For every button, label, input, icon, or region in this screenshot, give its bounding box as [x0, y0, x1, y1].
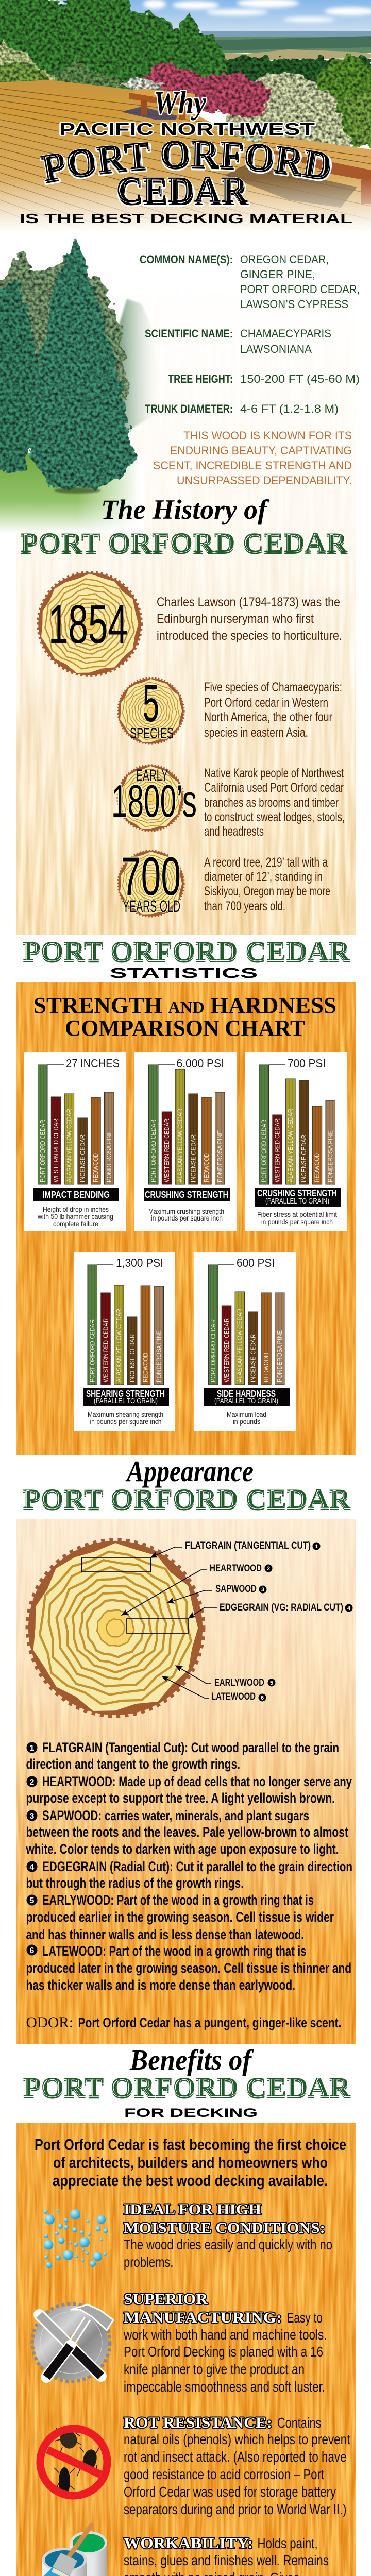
bar: port orford cedar: PORT ORFORD CEDAR [261, 1120, 268, 1182]
photo: port orford cedar trees [0, 238, 160, 533]
bar: port orford cedar: PORT ORFORD CEDAR [150, 1120, 157, 1182]
leader arrow: latewood [162, 1676, 209, 1698]
fact: trunk diameter: 4-6 FT (1.2-1.8 M) [240, 402, 339, 415]
chart description: complete failure [53, 1220, 98, 1228]
heading: the history of port orford cedar [20, 494, 348, 560]
hero photo: deck and landscape [0, 0, 371, 348]
benefit text: moisture: problems. [124, 2254, 173, 2270]
bar: incense cedar: INCENSE CEDAR [79, 1134, 86, 1182]
tree ring badge [27, 561, 153, 687]
chart description [148, 1208, 224, 1222]
callout: heartwood: HEARTWOOD [210, 1563, 262, 1574]
definition: flatgrain [26, 1740, 339, 1772]
bar: incense cedar: INCENSE CEDAR [129, 1334, 136, 1382]
description paragraph [153, 429, 352, 487]
benefit text: rot resistance: ROT RESISTANCE: [124, 2414, 272, 2431]
benefit text: moisture: IDEAL FOR HIGH [124, 2201, 261, 2218]
history item: 1854 [27, 561, 342, 687]
bar: redwood [262, 1293, 271, 1385]
definition: edgegrain: 4 [30, 1863, 35, 1872]
definitions list [26, 1740, 352, 2031]
definition: earlywood: 5 [30, 1896, 35, 1905]
history text [204, 766, 345, 839]
tree ring badge [111, 758, 197, 838]
history text [204, 680, 342, 740]
chart description: Maximum shearing strength [88, 1411, 163, 1418]
callout: heartwood: 2 [267, 1566, 270, 1572]
edgegrain cut box [127, 1619, 188, 1633]
benefit text: moisture [124, 2201, 332, 2270]
bar: western red cedar: WESTERN RED CEDAR [223, 1318, 230, 1382]
definition: sapwood: 3 [30, 1812, 35, 1821]
title line: Pacific Northwest: PACIFIC NORTHWEST [59, 120, 315, 139]
chart label [33, 1188, 119, 1201]
chart label: SHEARING STRENGTH [86, 1388, 165, 1399]
benefit text: workability: WORKABILITY: [124, 2535, 253, 2552]
chart label [144, 1188, 230, 1201]
chart label [83, 1388, 169, 1406]
tree ring badge: 5 [143, 674, 159, 733]
history text [204, 855, 330, 913]
bar: redwood: REDWOOD [203, 1153, 210, 1182]
definition: flatgrain: direction and tangent to the growth rings. [26, 1756, 240, 1772]
chart card: crushing strength parallel to grain [245, 1052, 347, 1231]
chart card: side hardness [194, 1252, 296, 1431]
title line: Cedar: CEDAR [117, 172, 249, 213]
chart title: STRENGTH AND HARDNESS [33, 993, 336, 1018]
heading: appearance port orford cedar: PORT ORFORD CEDAR [23, 1485, 351, 1516]
bar: incense cedar [248, 1312, 258, 1385]
chart description: in pounds per square inch [90, 1418, 162, 1426]
bar: incense cedar [189, 1094, 198, 1184]
tree ring badge: YEARS OLD [123, 897, 180, 916]
bar: western red cedar: WESTERN RED CEDAR [274, 1118, 281, 1182]
description paragraph: THIS WOOD IS KNOWN FOR ITS [183, 429, 352, 442]
value label: 6,000 PSI [176, 1057, 224, 1070]
callout: sapwood: 3 [261, 1587, 264, 1593]
chart description [37, 1206, 113, 1228]
chart description [227, 1411, 266, 1426]
heading: the history of port orford cedar: PORT ORFORD CEDAR [20, 527, 348, 558]
title line: is the best decking material: IS THE BEST DECKING MATERIAL [20, 212, 352, 226]
fact: scientific name: LAWSONIANA [240, 343, 312, 355]
heading: port orford cedar statistics: PORT ORFORD CEDAR [23, 938, 350, 969]
history item: 700 years old [111, 843, 330, 924]
history text: Edinburgh nurseryman who first [157, 612, 314, 626]
hero title [20, 86, 352, 226]
definition: heartwood [26, 1774, 352, 1806]
fact: common names: LAWSON’S CYPRESS [240, 298, 348, 311]
heading: port orford cedar statistics: PORT ORFORD CEDAR [23, 936, 350, 967]
callout: sapwood: SAPWOOD [215, 1584, 257, 1595]
tree ring badge: 700 [121, 846, 181, 907]
fact: tree height [168, 372, 360, 385]
bar: alaskan yellow cedar [286, 1079, 295, 1184]
callout: earlywood: EARLYWOOD [214, 1677, 264, 1688]
history text: introduced the species to horticulture. [157, 629, 342, 643]
bar: port orford cedar [38, 1065, 47, 1184]
chart description: in pounds [233, 1418, 260, 1426]
fact: common names: COMMON NAME(S): [140, 253, 233, 266]
bar: alaskan yellow cedar: ALASKAN YELLOW CEDAR [66, 1109, 73, 1182]
chart description [257, 1211, 337, 1226]
heading: port orford cedar statistics: STATISTICS [110, 965, 258, 981]
definition: edgegrain: but through the radius of the growth rings. [26, 1875, 244, 1891]
fact: common names: PORT ORFORD CEDAR, [240, 283, 360, 296]
bar: redwood [91, 1097, 100, 1184]
heading: appearance port orford cedar: PORT ORFORD CEDAR [23, 1483, 351, 1514]
bar: western red cedar [222, 1306, 231, 1385]
leader arrow: sapwood [167, 1590, 212, 1603]
bar: redwood [141, 1286, 150, 1385]
fact: common names: OREGON CEDAR, [240, 253, 329, 266]
chart label: CRUSHING STRENGTH [145, 1190, 228, 1200]
title line: Port Orford: PORT ORFORD [40, 140, 330, 181]
bar: redwood: REDWOOD [263, 1353, 270, 1382]
leader arrow: heartwood [122, 1570, 207, 1615]
description paragraph: ENDURING BEAUTY, CAPTIVATING [170, 444, 352, 457]
callout: edgegrain: 4 [347, 1605, 351, 1612]
chart label: CRUSHING STRENGTH [257, 1188, 337, 1198]
chart description: in pounds per square inch [261, 1218, 333, 1226]
panel: strength and hardness chart [16, 982, 356, 1455]
panel: history wood background [16, 278, 356, 935]
benefit text: manufacturing: Port Orford Decking is planed with a 16 [124, 2344, 323, 2360]
benefit text: workability: Holds paint, [258, 2535, 317, 2551]
icon: water drops [43, 2209, 108, 2268]
history text: Charles Lawson (1794-1873) was the [157, 595, 340, 609]
value label: 600 PSI [237, 1256, 275, 1269]
fact: tree height: TREE HEIGHT: [168, 372, 233, 385]
bar: redwood [312, 1106, 322, 1184]
chart label [255, 1188, 341, 1207]
chart label: (PARALLEL TO GRAIN) [94, 1397, 158, 1405]
heading: the history of port orford cedar: PORT ORFORD CEDAR [20, 529, 348, 560]
bar: redwood: REDWOOD [142, 1353, 149, 1382]
history text: North America, the other four [204, 710, 332, 724]
bar: western red cedar [51, 1097, 61, 1184]
heading: appearance port orford cedar [23, 1454, 351, 1516]
chart description: Fiber stress at potential limit [257, 1211, 337, 1218]
fact: common names: GINGER PINE, [240, 268, 315, 281]
bar: ponderosa pine: PONDEROSA PINE [327, 1130, 334, 1182]
fact: common names [140, 253, 360, 311]
history text: Port Orford cedar in Western [204, 696, 328, 710]
callout: flatgrain: 1 [315, 1544, 318, 1550]
chart description: with 50 lb hammer causing [37, 1213, 113, 1221]
bar: alaskan yellow cedar: ALASKAN YELLOW CEDAR [287, 1109, 294, 1182]
bar: port orford cedar [208, 1265, 218, 1385]
bar: incense cedar [127, 1317, 137, 1385]
bar: western red cedar: WESTERN RED CEDAR [163, 1118, 171, 1182]
history text [157, 595, 342, 643]
title line: Port Orford: PORT ORFORD [40, 142, 332, 185]
value label: 27 INCHES [66, 1057, 120, 1070]
chart description: Height of drop in inches [43, 1206, 109, 1213]
callout: latewood: LATEWOOD [211, 1691, 256, 1702]
heading: benefits of port orford cedar for decking: PORT ORFORD CEDAR [23, 2074, 351, 2105]
benefit text: manufacturing: work with both hand and machine tools. [123, 2327, 327, 2343]
value label: 700 PSI [288, 1057, 326, 1070]
bar: ponderosa pine: PONDEROSA PINE [156, 1330, 163, 1382]
benefit text: moisture: MOISTURE CONDITIONS: [124, 2219, 325, 2236]
chart description: in pounds per square inch [151, 1214, 223, 1222]
definition: edgegrain [26, 1859, 352, 1891]
fact: scientific name: SCIENTIFIC NAME: [145, 327, 233, 340]
bar: alaskan yellow cedar [114, 1285, 124, 1385]
bar: western red cedar: WESTERN RED CEDAR [53, 1118, 60, 1182]
tree ring badge: 1854 [48, 594, 128, 655]
definition: earlywood [26, 1892, 334, 1942]
callout: flatgrain: FLATGRAIN (TANGENTIAL CUT) [185, 1540, 311, 1551]
definition: heartwood: 2 [30, 1778, 35, 1787]
bar: ponderosa pine [275, 1293, 284, 1385]
benefit text: rot resistance: Contains [277, 2415, 322, 2431]
bar: ponderosa pine: PONDEROSA PINE [216, 1130, 224, 1182]
description paragraph: SCENT, INCREDIBLE STRENGTH AND [153, 459, 352, 472]
bar: alaskan yellow cedar [175, 1069, 185, 1184]
leader arrow: edgegrain [189, 1607, 217, 1618]
tree ring badge: SPECIES [130, 725, 174, 742]
history text: than 700 years old. [204, 899, 285, 913]
leader arrow: earlywood [176, 1666, 211, 1684]
callout: edgegrain: EDGEGRAIN (VG: RADIAL CUT) [220, 1602, 343, 1613]
history text: A record tree, 219’ tall with a [204, 855, 328, 870]
bar: incense cedar: INCENSE CEDAR [300, 1134, 308, 1182]
bar: incense cedar: INCENSE CEDAR [249, 1334, 257, 1382]
chart description: Maximum load [227, 1411, 266, 1418]
icon: no insects sign [40, 2428, 107, 2496]
icon: paint cans and brush [39, 2526, 107, 2576]
fact: trunk diameter: TRUNK DIAMETER: [145, 402, 233, 415]
history text: species in eastern Asia. [204, 725, 308, 740]
fact: tree height: 150-200 FT (45-60 M) [240, 372, 360, 385]
chart label: IMPACT BENDING [42, 1190, 110, 1200]
chart label: (PARALLEL TO GRAIN) [214, 1397, 278, 1405]
chart label [204, 1388, 290, 1406]
bar: alaskan yellow cedar: ALASKAN YELLOW CEDAR [237, 1309, 244, 1382]
fact: scientific name [145, 327, 331, 355]
bar: port orford cedar: PORT ORFORD CEDAR [210, 1319, 217, 1382]
bar: incense cedar [299, 1080, 309, 1184]
benefit text: manufacturing: MANUFACTURING: [124, 2309, 282, 2326]
definition: latewood: 6 [30, 1946, 35, 1955]
history item: 5 species [111, 671, 342, 751]
intro text [35, 2136, 346, 2190]
title line: Cedar: CEDAR [116, 169, 248, 210]
bar: incense cedar [78, 1118, 87, 1184]
bar: port orford cedar [148, 1065, 158, 1184]
bar: alaskan yellow cedar: ALASKAN YELLOW CEDAR [115, 1309, 123, 1382]
chart description: Maximum crushing strength [148, 1208, 224, 1215]
bar: ponderosa pine: PONDEROSA PINE [276, 1330, 283, 1382]
title word: Why: Why [154, 86, 206, 121]
bar: incense cedar: INCENSE CEDAR [190, 1134, 197, 1182]
bar: ponderosa pine [104, 1092, 114, 1184]
callout: earlywood: 5 [270, 1680, 273, 1686]
odor note [26, 2014, 341, 2031]
heading: the history of port orford cedar: The History of [101, 494, 269, 525]
value label: 1,300 PSI [116, 1256, 163, 1269]
heading: benefits of port orford cedar for decking: FOR DECKING [124, 2106, 258, 2120]
definition: sapwood [26, 1808, 348, 1857]
chart card: shearing strength [74, 1252, 175, 1431]
chart description [88, 1411, 163, 1426]
bar: ponderosa pine [154, 1286, 164, 1385]
leader arrow: flatgrain [150, 1547, 182, 1557]
benefit text: manufacturing [123, 2291, 327, 2395]
bar: port orford cedar: PORT ORFORD CEDAR [89, 1319, 96, 1382]
bar: alaskan yellow cedar [64, 1094, 74, 1184]
panel: benefits wood [16, 2123, 356, 2576]
fact: trunk diameter [145, 402, 339, 415]
bar: port orford cedar: PORT ORFORD CEDAR [39, 1120, 46, 1182]
chart label: SIDE HARDNESS [217, 1388, 276, 1399]
chart title [33, 993, 336, 1041]
heading: appearance port orford cedar: Appearance [125, 1454, 254, 1488]
tree ring badge: 1800’s [111, 775, 197, 826]
history text: and headrests [204, 824, 264, 839]
tree ring badge [111, 671, 191, 751]
bar: redwood: REDWOOD [314, 1153, 321, 1182]
bar: ponderosa pine [326, 1100, 335, 1184]
panel: appearance wood [9, 1519, 356, 2044]
bar: redwood [202, 1097, 211, 1184]
bar: port orford cedar [88, 1265, 97, 1385]
fact table [140, 253, 360, 487]
heading: benefits of port orford cedar for decking: Benefits of [129, 2044, 254, 2076]
heading: benefits of port orford cedar for decking [23, 2044, 351, 2120]
odor note: ODOR: [26, 2014, 73, 2031]
definition: latewood: has thicker walls and is more dense than earlywood. [26, 1977, 295, 1993]
benefit text: rot resistance [124, 2414, 350, 2517]
tree ring badge [111, 843, 191, 924]
tree ring badge: EARLY [136, 766, 168, 785]
bar: port orford cedar [259, 1065, 269, 1184]
chart card: impact bending [24, 1052, 126, 1231]
benefit text: manufacturing: knife planner to give the product an [124, 2361, 305, 2377]
chart card: crushing strength [134, 1052, 237, 1231]
chart label: (PARALLEL TO GRAIN) [265, 1197, 329, 1206]
bar: alaskan yellow cedar: ALASKAN YELLOW CEDAR [177, 1109, 184, 1182]
bar: western red cedar: WESTERN RED CEDAR [102, 1318, 109, 1382]
definition: flatgrain: 1 [30, 1744, 35, 1753]
description paragraph: UNSURPASSED DEPENDABILITY. [177, 474, 352, 487]
chart title: COMPARISON CHART [65, 1015, 305, 1041]
benefit text: workability [124, 2535, 329, 2576]
fact: scientific name: CHAMAECYPARIS [240, 327, 331, 340]
flatgrain cut box [81, 1557, 150, 1572]
heading: benefits of port orford cedar for decking: PORT ORFORD CEDAR [23, 2072, 351, 2103]
definition: latewood [26, 1943, 351, 1993]
history text: diameter of 12’, standing in [204, 870, 323, 884]
diagram: tree cross section [9, 1520, 352, 1734]
benefit text: manufacturing: impeccable smoothness and soft luster. [124, 2379, 325, 2395]
callout: latewood: 6 [261, 1695, 264, 1701]
benefit text: rot resistance: good resistance to acid corrosion – Port [124, 2466, 324, 2482]
heading: port orford cedar statistics [23, 936, 350, 981]
benefit text: manufacturing: Easy to [286, 2310, 323, 2326]
bar: alaskan yellow cedar [235, 1292, 245, 1385]
history item: early 1800s [111, 758, 345, 839]
bar: redwood: REDWOOD [92, 1153, 99, 1182]
bar: ponderosa pine [215, 1092, 225, 1184]
bar: ponderosa pine: PONDEROSA PINE [106, 1130, 113, 1182]
icon: saw blade, chisel and hammer [33, 2304, 113, 2381]
bar: western red cedar [101, 1293, 110, 1385]
benefit text: manufacturing: SUPERIOR [124, 2291, 208, 2308]
